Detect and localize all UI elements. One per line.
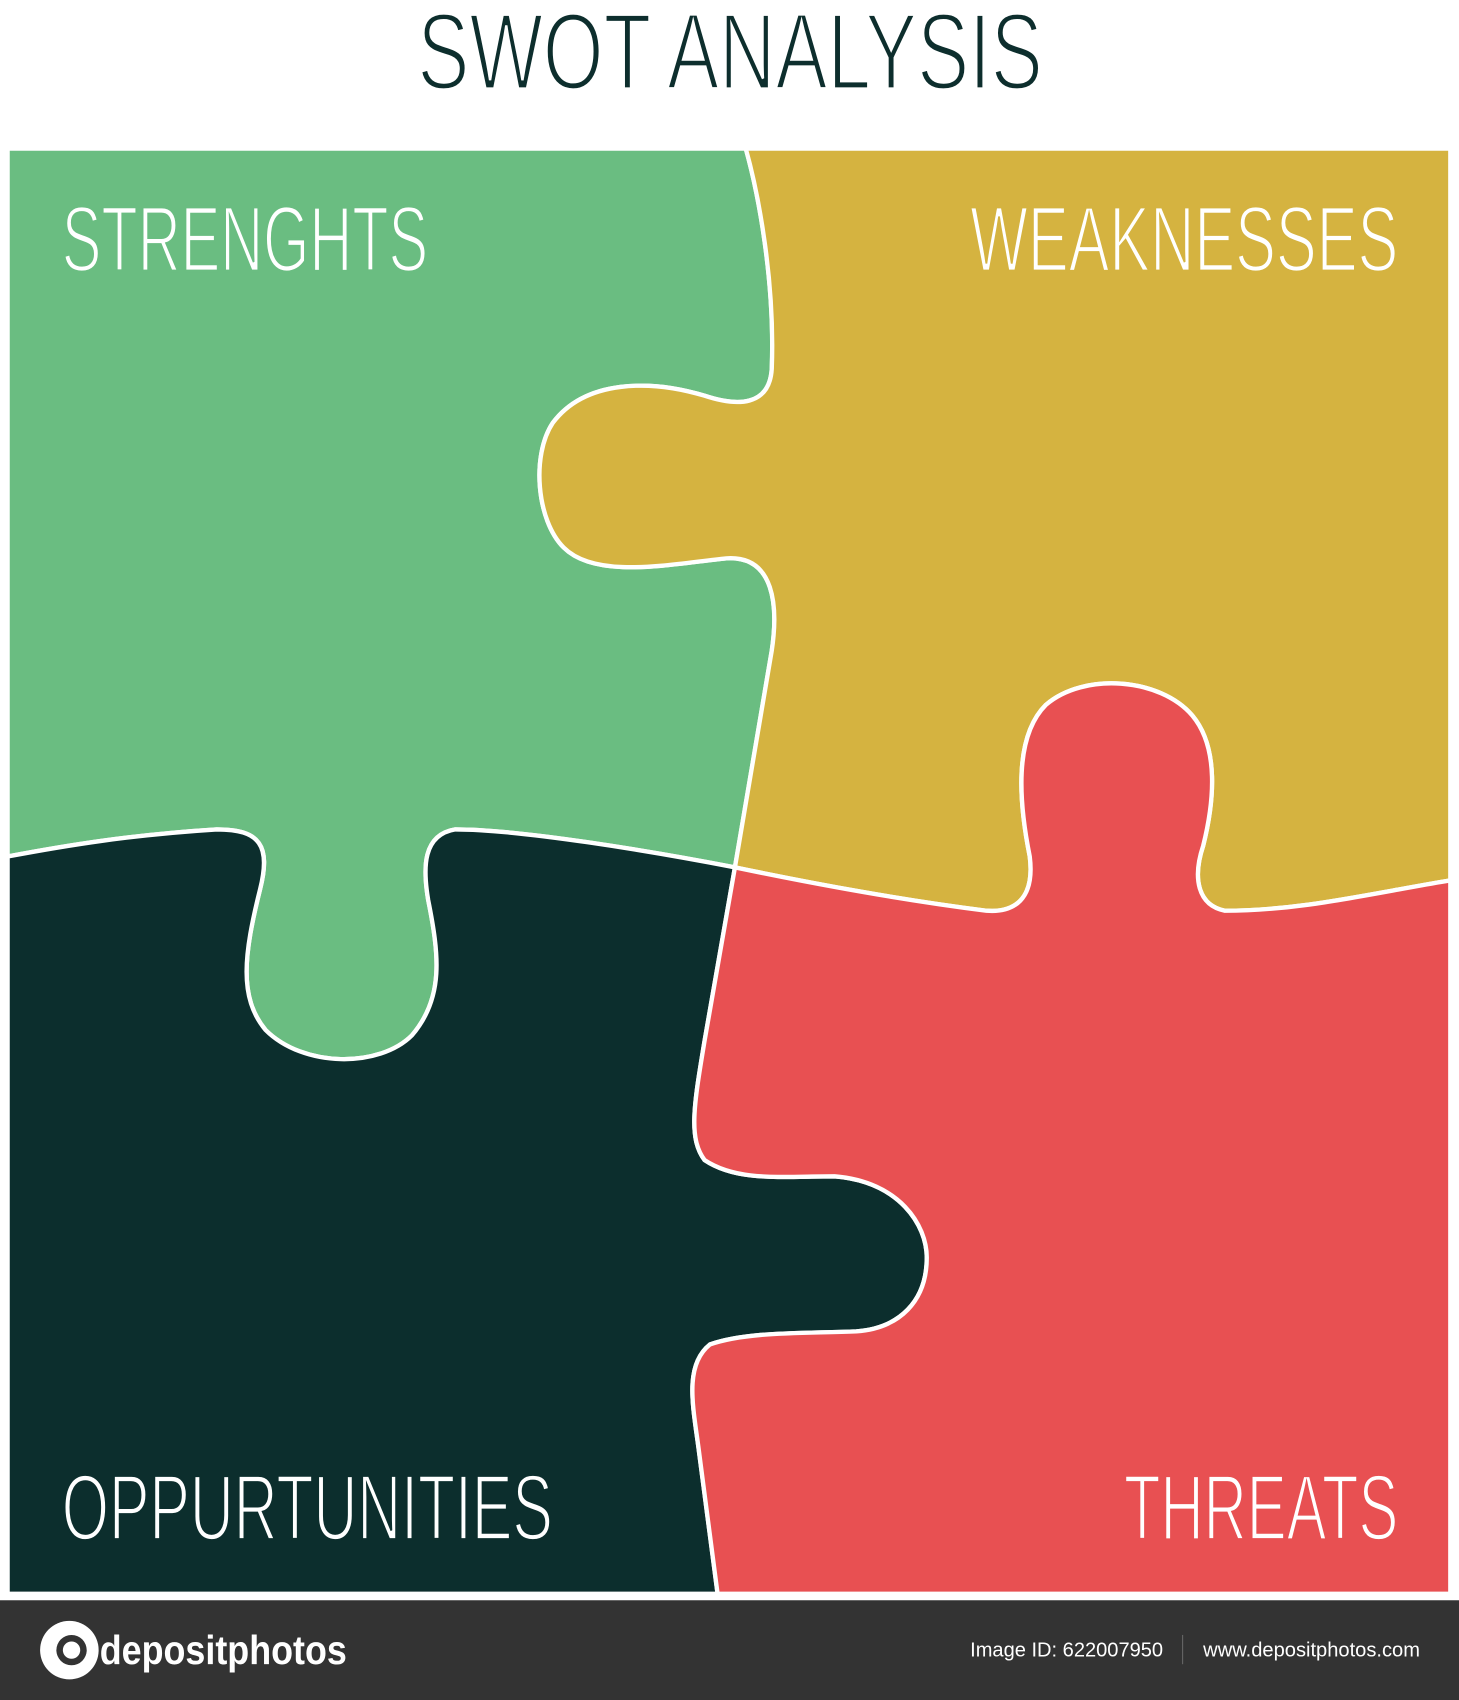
image id: Image ID: 622007950 — [970, 1639, 1163, 1662]
panel: opportunities piece — [8, 829, 927, 1594]
panel: threats piece — [692, 683, 1450, 1594]
panel: strengths piece — [8, 149, 774, 1059]
icon: camera logo — [40, 1621, 99, 1679]
label: opportunities: OPPURTUNITIES — [62, 1456, 553, 1560]
panel: weaknesses piece — [539, 149, 1450, 911]
footer bar — [0, 1600, 1459, 1700]
label: strengths: STRENGHTS — [62, 187, 428, 291]
logo text: depositphotos — [100, 1627, 347, 1673]
website: www.depositphotos.com — [1202, 1639, 1420, 1662]
